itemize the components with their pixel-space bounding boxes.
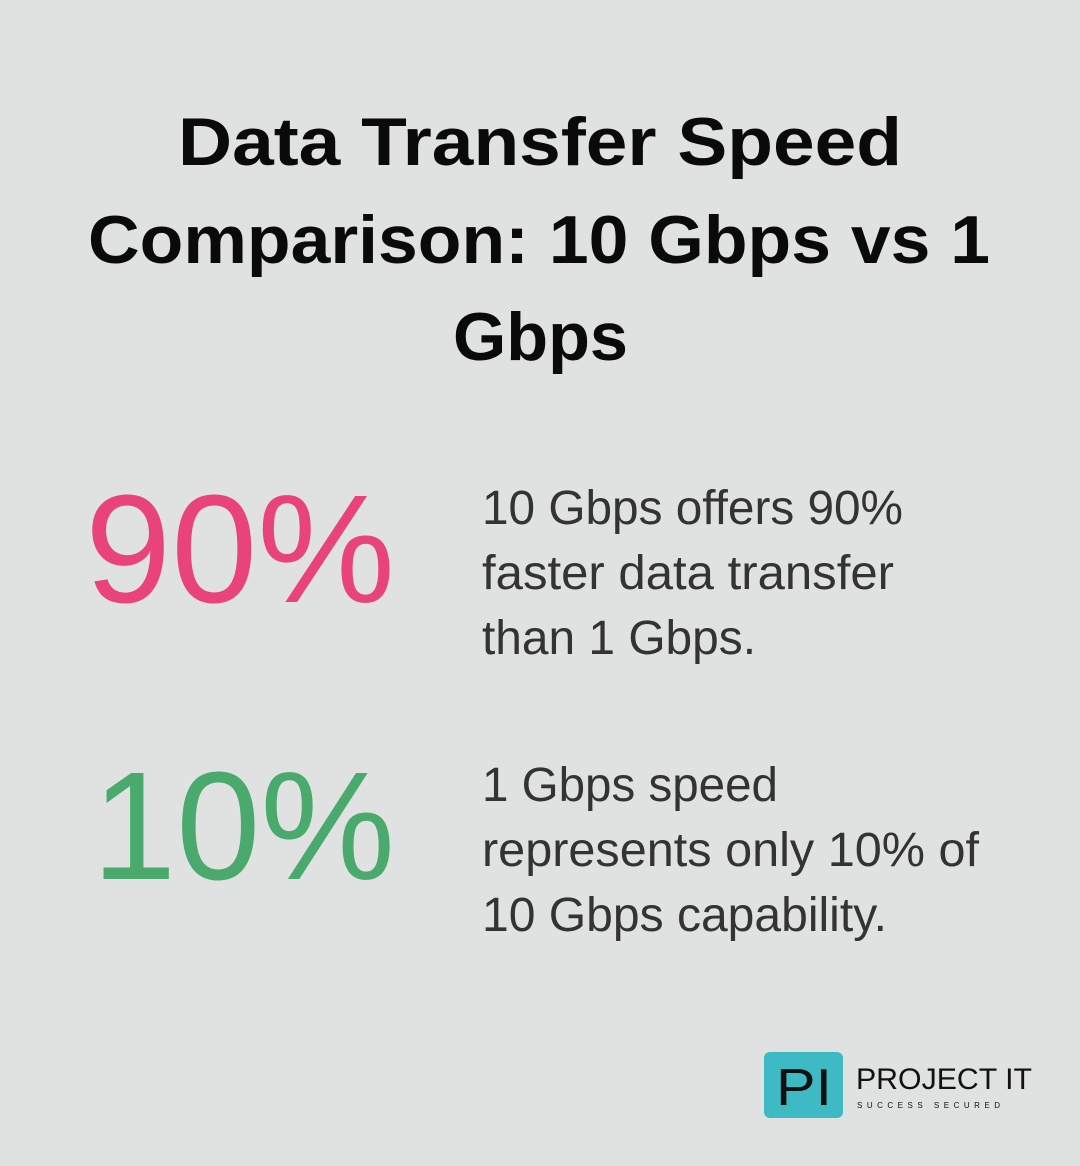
description 90% (482, 482, 903, 665)
logo icon (764, 1052, 843, 1118)
stat: 10% (92, 740, 980, 942)
description 10%: 10 Gbps capability. (482, 889, 887, 942)
title: Data Transfer Speed (178, 104, 902, 180)
logo wordmark: PROJECT IT (856, 1063, 1032, 1096)
logo wordmark: SUCCESS SECURED (857, 1101, 1000, 1110)
title: Comparison: 10 Gbps vs 1 (88, 202, 990, 278)
logo wordmark (856, 1063, 1032, 1110)
description 10%: represents only 10% of (482, 824, 980, 877)
big number 90%: 90% (85, 463, 395, 635)
big number 10%: 10% (92, 740, 395, 912)
title: Gbps (453, 299, 628, 375)
description 90%: faster data transfer (482, 547, 894, 600)
title (88, 104, 990, 375)
description 10% (482, 759, 980, 942)
description 10%: 1 Gbps speed (482, 759, 778, 812)
description 90%: than 1 Gbps. (482, 612, 756, 665)
logo (764, 1052, 1032, 1118)
description 90%: 10 Gbps offers 90% (482, 482, 903, 535)
logo icon: PI (776, 1059, 832, 1117)
stat: 90% (85, 463, 903, 665)
